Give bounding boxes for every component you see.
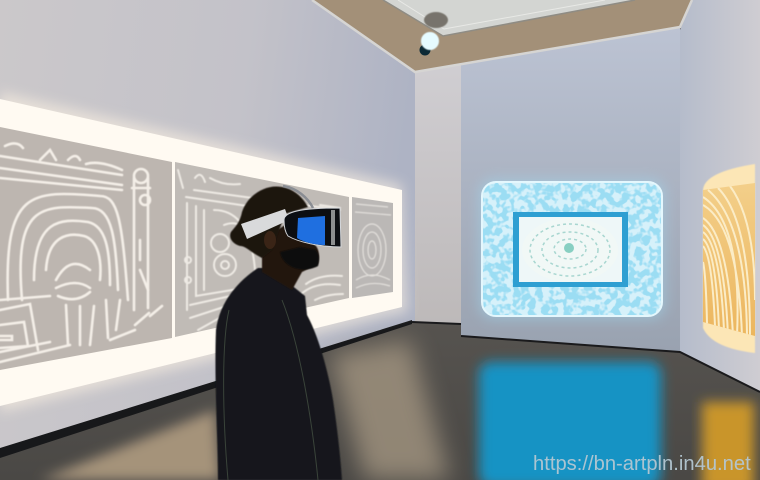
- floor: [0, 322, 760, 480]
- baseboards: [0, 320, 760, 458]
- jacket seams: [224, 300, 318, 480]
- left wall: [0, 0, 415, 450]
- neck and face: [262, 225, 319, 290]
- ceiling spotlight: [420, 12, 448, 56]
- panel: right pattern: [352, 197, 393, 298]
- inner frame: [513, 212, 628, 287]
- blue projection: [478, 178, 666, 320]
- main back wall: [461, 28, 680, 352]
- orange light panel: [703, 164, 755, 353]
- panel: middle pattern: [175, 162, 349, 337]
- blue screen: [297, 216, 325, 245]
- visor highlight: [331, 210, 335, 245]
- illuminated wall frieze: [0, 92, 408, 412]
- body silhouette: [215, 268, 342, 480]
- hair: [230, 186, 308, 258]
- right wall: [680, 0, 760, 392]
- side strap: [241, 209, 289, 239]
- website watermark: https://bn-artpln.in4u.net: [533, 453, 751, 475]
- floor reflections: [40, 340, 754, 480]
- panel: large pattern: [0, 127, 172, 370]
- ceiling: [312, 0, 692, 72]
- top strap: [283, 186, 313, 208]
- beard: [280, 247, 319, 270]
- ear: [264, 231, 276, 249]
- back corner wall: [415, 60, 461, 336]
- headset visor: [284, 208, 341, 247]
- person wearing VR headset: [215, 186, 342, 480]
